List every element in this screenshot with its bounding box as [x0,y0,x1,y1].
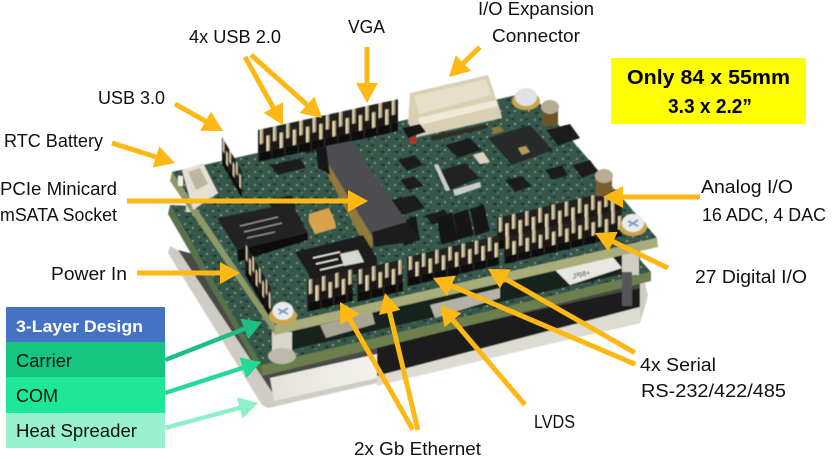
label: analog I/O: 16 ADC, 4 DAC [702,205,826,225]
label: VGA: VGA [348,17,385,37]
label: I/O expansion connector: Connector [492,26,580,46]
label: LVDS: LVDS [534,412,575,432]
arrow: USB 2.0 first [235,52,293,130]
label: analog I/O: Analog I/O [701,177,793,197]
processor and surface-mount chips [268,124,598,225]
label: PCIe minicard mSATA socket: PCIe Minicard [0,179,117,199]
arrow: serial first [483,259,640,362]
arrow: serial second [429,268,640,374]
power module chip [295,235,377,287]
arrow: power in [137,262,240,284]
board photo: three stacked layers [168,75,658,408]
power in pin header [245,243,271,319]
arrow: USB 2.0 second [244,47,329,126]
label: USB 3.0: USB 3.0 [98,88,165,108]
standoffs between layers [186,198,639,364]
arrow: PCIe minicard [127,190,368,212]
arrow: I/O expansion connector [441,39,488,85]
legend: 3-layer design: Carrier [16,351,72,371]
black jumper blocks [400,204,490,246]
label: PCIe minicard mSATA socket: mSATA Socket [0,205,117,225]
COM board layer [168,205,651,376]
legend: 3-layer design [6,307,165,448]
arrow: COM layer [162,352,264,404]
legend: 3-layer design: Heat Spreader [16,421,137,441]
arrow: USB 3.0 [170,94,228,141]
RTC battery connector [178,163,218,210]
USB 3.0 pin header [222,137,242,199]
label: 4x serial [640,355,786,401]
linear regulator chip [217,203,308,262]
carrier board top layer [170,92,658,335]
label: 4x serial: RS-232/422/485 [641,381,786,401]
label: 4x serial: 4x Serial [640,355,716,375]
arrow: heat spreader layer [162,392,261,438]
label: 4x USB 2.0: 4x USB 2.0 [189,27,281,47]
label: I/O expansion connector [478,0,594,46]
arrow: VGA [356,47,378,103]
label: RTC battery: RTC Battery [4,131,103,151]
arrow: ethernet second [374,290,429,433]
label: 2x Gb Ethernet: 2x Gb Ethernet [354,439,481,459]
size callout: 3.3 x 2.2” [668,96,752,118]
label: power in: Power In [51,264,127,284]
size callout: Only 84 x 55mm [627,67,790,89]
front serial, ethernet and digital I/O pin headers [307,209,622,312]
legend: 3-layer design: COM [16,386,58,406]
label: analog I/O [701,177,826,225]
arrow: carrier layer [161,312,266,370]
COM board layer: Jᴲ98+ [572,270,591,281]
arrow: ethernet first [330,297,422,435]
arrow: LVDS [432,298,533,412]
analog I/O pin header [497,188,622,250]
label: PCIe minicard mSATA socket [0,179,117,225]
size callout [611,58,806,124]
PCIe minicard mSATA socket [316,141,418,248]
I/O expansion connector [408,75,502,144]
label: 27 digital I/O: 27 Digital I/O [695,267,807,287]
legend: 3-layer design: 3-Layer Design [16,317,143,336]
heat spreader layer [168,246,648,408]
mounting screws [269,88,647,325]
arrow: analog I/O [603,186,700,208]
arrow: digital I/O [590,223,673,278]
USB 2.0 and VGA pin headers [258,99,398,162]
arrow: RTC battery [109,133,178,173]
gold capacitor [309,208,336,234]
